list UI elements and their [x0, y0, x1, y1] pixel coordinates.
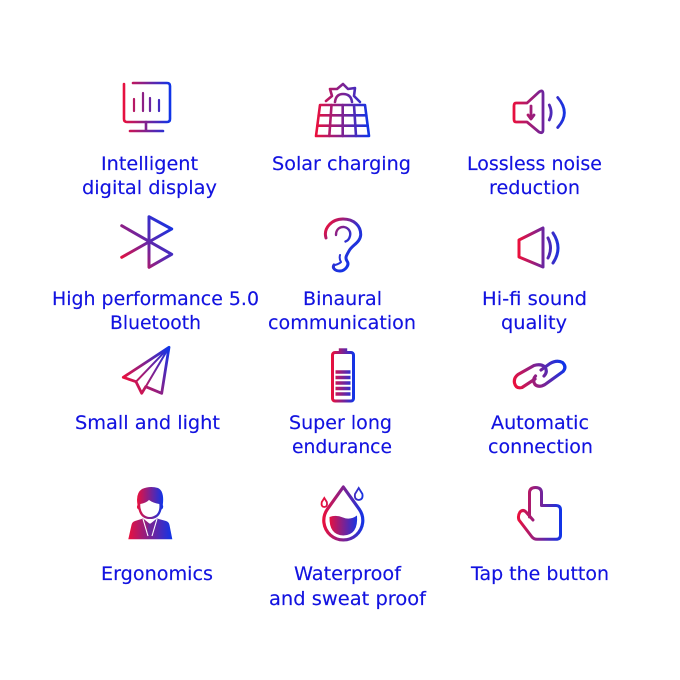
icon: solar panel with sun [316, 84, 369, 136]
feature label: Intelligent digital display [82, 153, 217, 199]
icon: hi-fi speaker [519, 228, 558, 267]
icon: water drop with droplets [322, 487, 363, 540]
feature label: Lossless noise reduction: Lossless noise [467, 153, 602, 175]
icon: speaker with noise reduction arrow [514, 91, 564, 133]
feature label: Waterproof and sweat proof: and sweat proof [269, 588, 427, 610]
feature label: Waterproof and sweat proof: Waterproof [294, 563, 402, 585]
feature label: Hi-fi sound quality: Hi-fi sound [482, 288, 587, 310]
feature label: Binaural communication [268, 288, 416, 334]
feature label: Automatic connection [488, 412, 593, 458]
icon: paper plane [123, 347, 169, 393]
icon: battery [332, 350, 354, 401]
icon: Bluetooth symbol [122, 217, 172, 267]
feature label: Super long endurance: endurance [292, 436, 392, 458]
feature label: Solar charging: Solar charging [272, 153, 411, 175]
feature label: Waterproof and sweat proof [269, 563, 427, 610]
feature label: Binaural communication: communication [268, 312, 416, 334]
feature label: High performance 5.0 Bluetooth [52, 288, 259, 334]
feature label: Automatic connection: Automatic [491, 412, 589, 434]
feature label: Automatic connection: connection [488, 436, 593, 458]
feature label: Ergonomics: Ergonomics [101, 563, 213, 585]
icon: ear [325, 219, 361, 271]
feature label: Intelligent digital display: digital display [82, 177, 217, 199]
feature label: Small and light: Small and light [75, 412, 220, 434]
icon: tapping finger hand [518, 488, 560, 539]
feature label: Hi-fi sound quality: quality [501, 312, 567, 334]
feature label: Lossless noise reduction: reduction [489, 177, 580, 199]
icon: businessman figure [128, 487, 172, 539]
icon: digital display monitor [124, 83, 170, 131]
feature label: Super long endurance [289, 412, 392, 458]
feature label: High performance 5.0 Bluetooth: High performance 5.0 [52, 288, 259, 310]
feature label: Tap the button: Tap the button [470, 563, 609, 585]
feature label: High performance 5.0 Bluetooth: Bluetooth [110, 312, 201, 334]
feature label: Lossless noise reduction [467, 153, 602, 199]
feature label: Intelligent digital display: Intelligent [101, 153, 198, 175]
feature label: Super long endurance: Super long [289, 412, 392, 434]
icon: interlocking chain link [514, 361, 565, 388]
feature label: Hi-fi sound quality [482, 288, 587, 334]
feature label: Binaural communication: Binaural [303, 288, 382, 310]
